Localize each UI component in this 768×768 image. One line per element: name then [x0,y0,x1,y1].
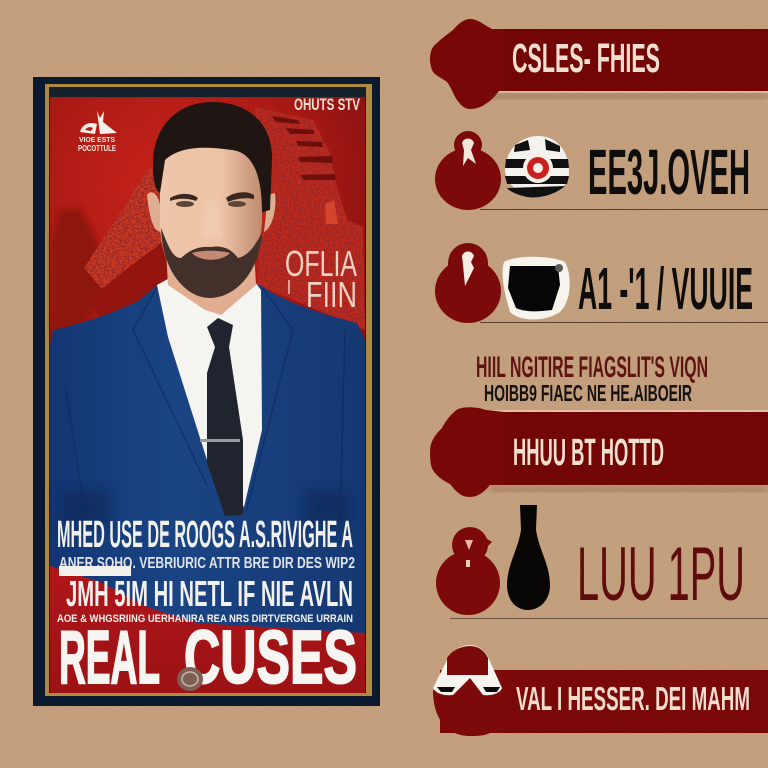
necktie [207,318,243,516]
poster text block [57,514,355,625]
icon: poster seal [177,667,203,691]
icon: white and black box [503,257,570,320]
icon: person marker 1 [435,131,501,210]
tie clip [200,439,240,442]
panel: portrait poster [33,77,380,706]
poster main title: REAL [59,615,160,699]
banner 3 [433,645,768,736]
poster side headline [285,243,357,315]
lower poster red sweep [50,566,365,693]
poster frame [33,77,380,706]
infographic canvas: MHED USE DE ROOGS A.S.RIVIGHE A [57,514,353,556]
icon: poster logo [78,111,117,153]
shirt [157,275,262,507]
poster main title: CUSES [184,615,357,699]
poster top-right caption: OHUTS STV [294,95,360,114]
row 1 [435,131,768,210]
banner 2 [430,407,768,497]
banner 1 [430,19,768,109]
poster side headline: FIIN [306,274,357,315]
suit jacket [50,285,365,640]
nose [202,200,222,238]
suit lapel shading [65,287,345,520]
mid caption [476,351,708,406]
icon: poster logo: POCOTTULE [78,144,117,153]
icon: person marker 2 [435,243,501,323]
icon: black bottle [507,505,550,610]
row 2 [435,243,768,323]
poster side headline: I [287,277,291,299]
hair [153,102,272,212]
neck [166,250,256,315]
ears [147,192,275,232]
icon: striped badge [505,136,569,197]
icon: white glasses cap [433,645,502,695]
poster background pyramids [52,107,365,330]
icon: poster logo: VIOE ESTS [79,137,115,144]
panel: causes list [430,19,768,736]
suit shadows [60,490,350,525]
mouth [192,251,230,260]
face [160,140,262,298]
row 3 [436,505,768,618]
poster text block: ANER SOHO. VEBRIURIC ATTR BRE DIR DES WIP2 [59,555,355,572]
poster side headline: OFLIA [285,243,357,284]
portrait: man in suit [50,102,365,693]
poster text block: AOE & WHGSRIING UERHANIRA REA NRS DIRTVERGNE URRAIN [57,613,353,625]
poster main title [59,615,357,699]
icon: person marker 3 [436,527,500,615]
beard [161,228,262,298]
poster text block: JMH 5IM HI NETL IF NIE AVLN [66,573,353,614]
eyes and brows [170,192,254,207]
